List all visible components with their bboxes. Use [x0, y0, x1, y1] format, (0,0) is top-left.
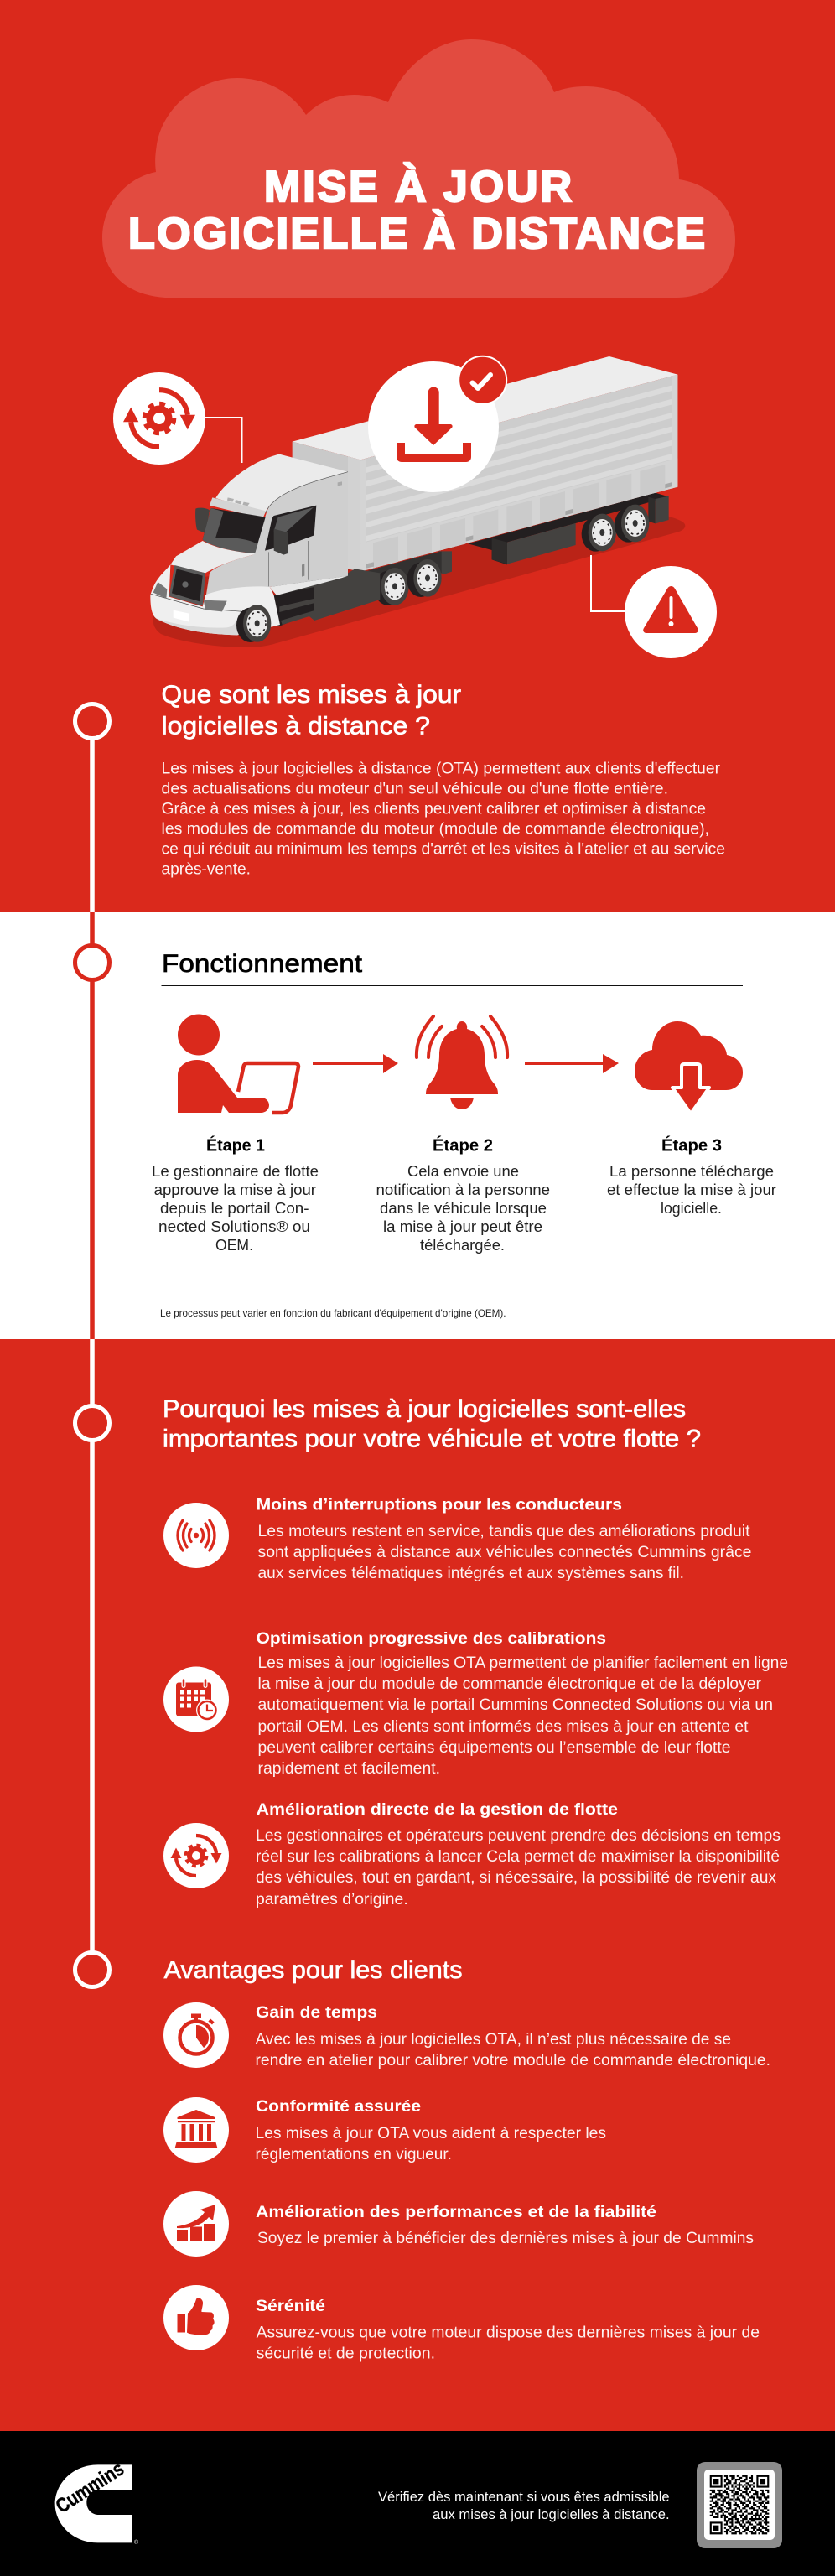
text block: intro: des actualisations du moteur d'un seul véhicule ou d'une flotte entière. — [161, 780, 668, 797]
footer call to action — [378, 2489, 670, 2522]
red background: reasons and benefits — [0, 1339, 835, 2431]
connector: gear to cab — [205, 418, 241, 463]
step 3: Étape 3 — [661, 1135, 722, 1155]
icon: institution building — [163, 2097, 229, 2163]
icon: gear with arrows — [113, 372, 205, 465]
step 2: téléchargée. — [420, 1237, 505, 1254]
step 3: logicielle. — [661, 1200, 722, 1217]
icon: gear with arrows small — [163, 1823, 229, 1888]
step 2: la mise à jour peut être — [383, 1218, 542, 1235]
step 3 — [607, 1135, 776, 1217]
step 2 — [376, 1135, 550, 1254]
icon: growth chart — [163, 2191, 229, 2257]
logo: Cummins: Cummins — [52, 2458, 128, 2518]
footer call to action: aux mises à jour logicielles à distance. — [433, 2506, 670, 2522]
icon: wireless signal — [163, 1503, 229, 1568]
truck cab — [150, 454, 380, 642]
arrow: step 2 to 3 — [525, 1054, 619, 1073]
step 1: depuis le portail Con- — [160, 1200, 309, 1217]
timeline marker 1 — [75, 704, 109, 738]
step 2: Étape 2 — [433, 1135, 493, 1155]
item: time saving: Gain de temps — [256, 2004, 377, 2022]
item: progressive optimisation: Optimisation progressive des calibrations — [257, 1630, 606, 1648]
item: fleet management: des véhicules, tout en gardant, si nécessaire, la possibilité de revenir aux — [256, 1869, 776, 1887]
step 1: approuve la mise à jour — [154, 1182, 316, 1198]
text block: intro: Les mises à jour logicielles à distance (OTA) permettent aux clients d'effectuer — [161, 760, 721, 777]
item: compliance — [255, 2098, 606, 2163]
item: progressive optimisation: rapidement et facilement. — [258, 1760, 440, 1778]
item: performance: Soyez le premier à bénéficier des dernières mises à jour de Cummins — [257, 2230, 754, 2247]
title — [128, 163, 705, 258]
item: fewer interruptions: aux services télématiques intégrés et aux systèmes sans fil. — [258, 1565, 684, 1582]
item: fleet management: réel sur les calibrations à lancer Cela permet de maximiser la disponibilité — [256, 1848, 780, 1866]
QR code — [697, 2462, 782, 2548]
item: time saving: rendre en atelier pour calibrer votre module de commande électronique. — [255, 2052, 770, 2070]
timeline marker 4 — [75, 1952, 109, 1987]
item: peace of mind: sécurité et de protection. — [257, 2345, 435, 2363]
icon: cloud download — [635, 1021, 743, 1114]
item: progressive optimisation: portail OEM. Les clients sont informés des mises à jour en attente et — [258, 1718, 749, 1736]
item: compliance: Les mises à jour OTA vous aident à respecter les — [255, 2125, 606, 2142]
heading: Fonctionnement: Fonctionnement — [162, 950, 363, 978]
step 2: Cela envoie une — [407, 1163, 519, 1180]
footer call to action: Vérifiez dès maintenant si vous êtes admissible — [378, 2489, 670, 2505]
item: progressive optimisation — [257, 1630, 788, 1778]
item: fleet management: Amélioration directe de la gestion de flotte — [257, 1801, 618, 1819]
text block: intro: après-vente. — [161, 860, 251, 878]
heading: what are updates: Que sont les mises à jour — [161, 681, 461, 709]
arrow: step 1 to 2 — [313, 1054, 398, 1073]
connector: alert to wheels — [591, 555, 625, 611]
step 1: OEM. — [215, 1237, 253, 1254]
text block: intro: ce qui réduit au minimum les temps d'arrêt et les visites à l'atelier et au service — [161, 840, 725, 858]
step 1 — [152, 1135, 319, 1254]
item: fewer interruptions: Moins d’interruptions pour les conducteurs — [257, 1496, 622, 1514]
item: progressive optimisation: la mise à jour du module de commande électronique et de la déployer — [258, 1675, 762, 1693]
white section background: Fonctionnement — [0, 912, 835, 1339]
step 2: dans le véhicule lorsque — [380, 1200, 547, 1217]
item: peace of mind — [256, 2298, 760, 2363]
item: fewer interruptions: sont appliquées à distance aux véhicules connectés Cummins grâce — [258, 1544, 751, 1561]
truck shadow — [153, 491, 685, 647]
heading: why updates matter: importantes pour votre véhicule et votre flotte ? — [163, 1426, 701, 1452]
item: compliance: Conformité assurée — [256, 2098, 421, 2116]
step 3: et effectue la mise à jour — [607, 1182, 776, 1198]
heading: why updates matter: Pourquoi les mises à jour logicielles sont-elles — [163, 1395, 686, 1423]
item: fewer interruptions — [257, 1496, 752, 1582]
step 1: Étape 1 — [206, 1135, 265, 1155]
footnote: Le processus peut varier en fonction du fabricant d'équipement d'origine (OEM). — [160, 1307, 506, 1319]
logo: Cummins: ® — [134, 2539, 139, 2546]
icon: download with check — [368, 356, 506, 492]
red background top — [0, 0, 835, 913]
item: time saving — [255, 2004, 770, 2070]
title cloud — [102, 39, 735, 298]
heading: what are updates — [161, 681, 461, 740]
icon: bell — [417, 1016, 507, 1109]
item: time saving: Avec les mises à jour logicielles OTA, il n’est plus nécessaire de se — [255, 2031, 731, 2049]
item: peace of mind: Sérénité — [256, 2298, 325, 2315]
item: performance — [256, 2204, 754, 2247]
icon: warning triangle — [625, 566, 717, 658]
icon: stopwatch — [163, 2002, 229, 2068]
icon: person at laptop — [178, 1015, 298, 1113]
icon: calendar with clock — [163, 1667, 229, 1732]
heading: what are updates: logicielles à distance ? — [161, 713, 430, 740]
heading: benefits: Avantages pour les clients — [164, 1956, 462, 1984]
text block: intro: les modules de commande du moteur (module de commande électronique), — [161, 820, 709, 838]
timeline marker 3 — [75, 1405, 109, 1441]
heading: why updates matter — [163, 1395, 701, 1452]
truck rear part: trailer, chassis and rear wheels — [293, 356, 677, 610]
item: performance: Amélioration des performances et de la fiabilité — [256, 2204, 656, 2221]
text block: intro — [161, 760, 725, 878]
icon: thumbs up — [163, 2285, 229, 2350]
item: fewer interruptions: Les moteurs restent en service, tandis que des améliorations produit — [258, 1523, 750, 1540]
item: peace of mind: Assurez-vous que votre moteur dispose des dernières mises à jour de — [257, 2324, 760, 2341]
step 2: notification à la personne — [376, 1182, 550, 1198]
black footer background — [0, 2431, 835, 2576]
title: LOGICIELLE À DISTANCE — [128, 210, 705, 258]
title: MISE À JOUR — [264, 163, 572, 211]
item: progressive optimisation: automatiquement via le portail Cummins Connected Solutions ou via un — [258, 1696, 773, 1714]
item: progressive optimisation: Les mises à jour logicielles OTA permettent de planifier facilement en ligne — [258, 1654, 788, 1672]
timeline line — [90, 721, 95, 1970]
item: fleet management: Les gestionnaires et opérateurs peuvent prendre des décisions en temps — [256, 1827, 781, 1845]
step 1: Le gestionnaire de flotte — [152, 1163, 319, 1180]
item: compliance: réglementations en vigueur. — [255, 2146, 452, 2163]
item: fleet management — [256, 1801, 781, 1909]
logo: Cummins — [52, 2458, 139, 2546]
step 3: La personne télécharge — [609, 1163, 774, 1180]
text block: intro: Grâce à ces mises à jour, les clients peuvent calibrer et optimiser à distance — [161, 800, 706, 818]
item: progressive optimisation: peuvent calibrer certains équipements ou l’ensemble de leur flotte — [258, 1739, 731, 1757]
item: fleet management: paramètres d’origine. — [256, 1891, 408, 1909]
step 1: nected Solutions® ou — [158, 1218, 310, 1235]
timeline marker 2 — [75, 946, 109, 979]
